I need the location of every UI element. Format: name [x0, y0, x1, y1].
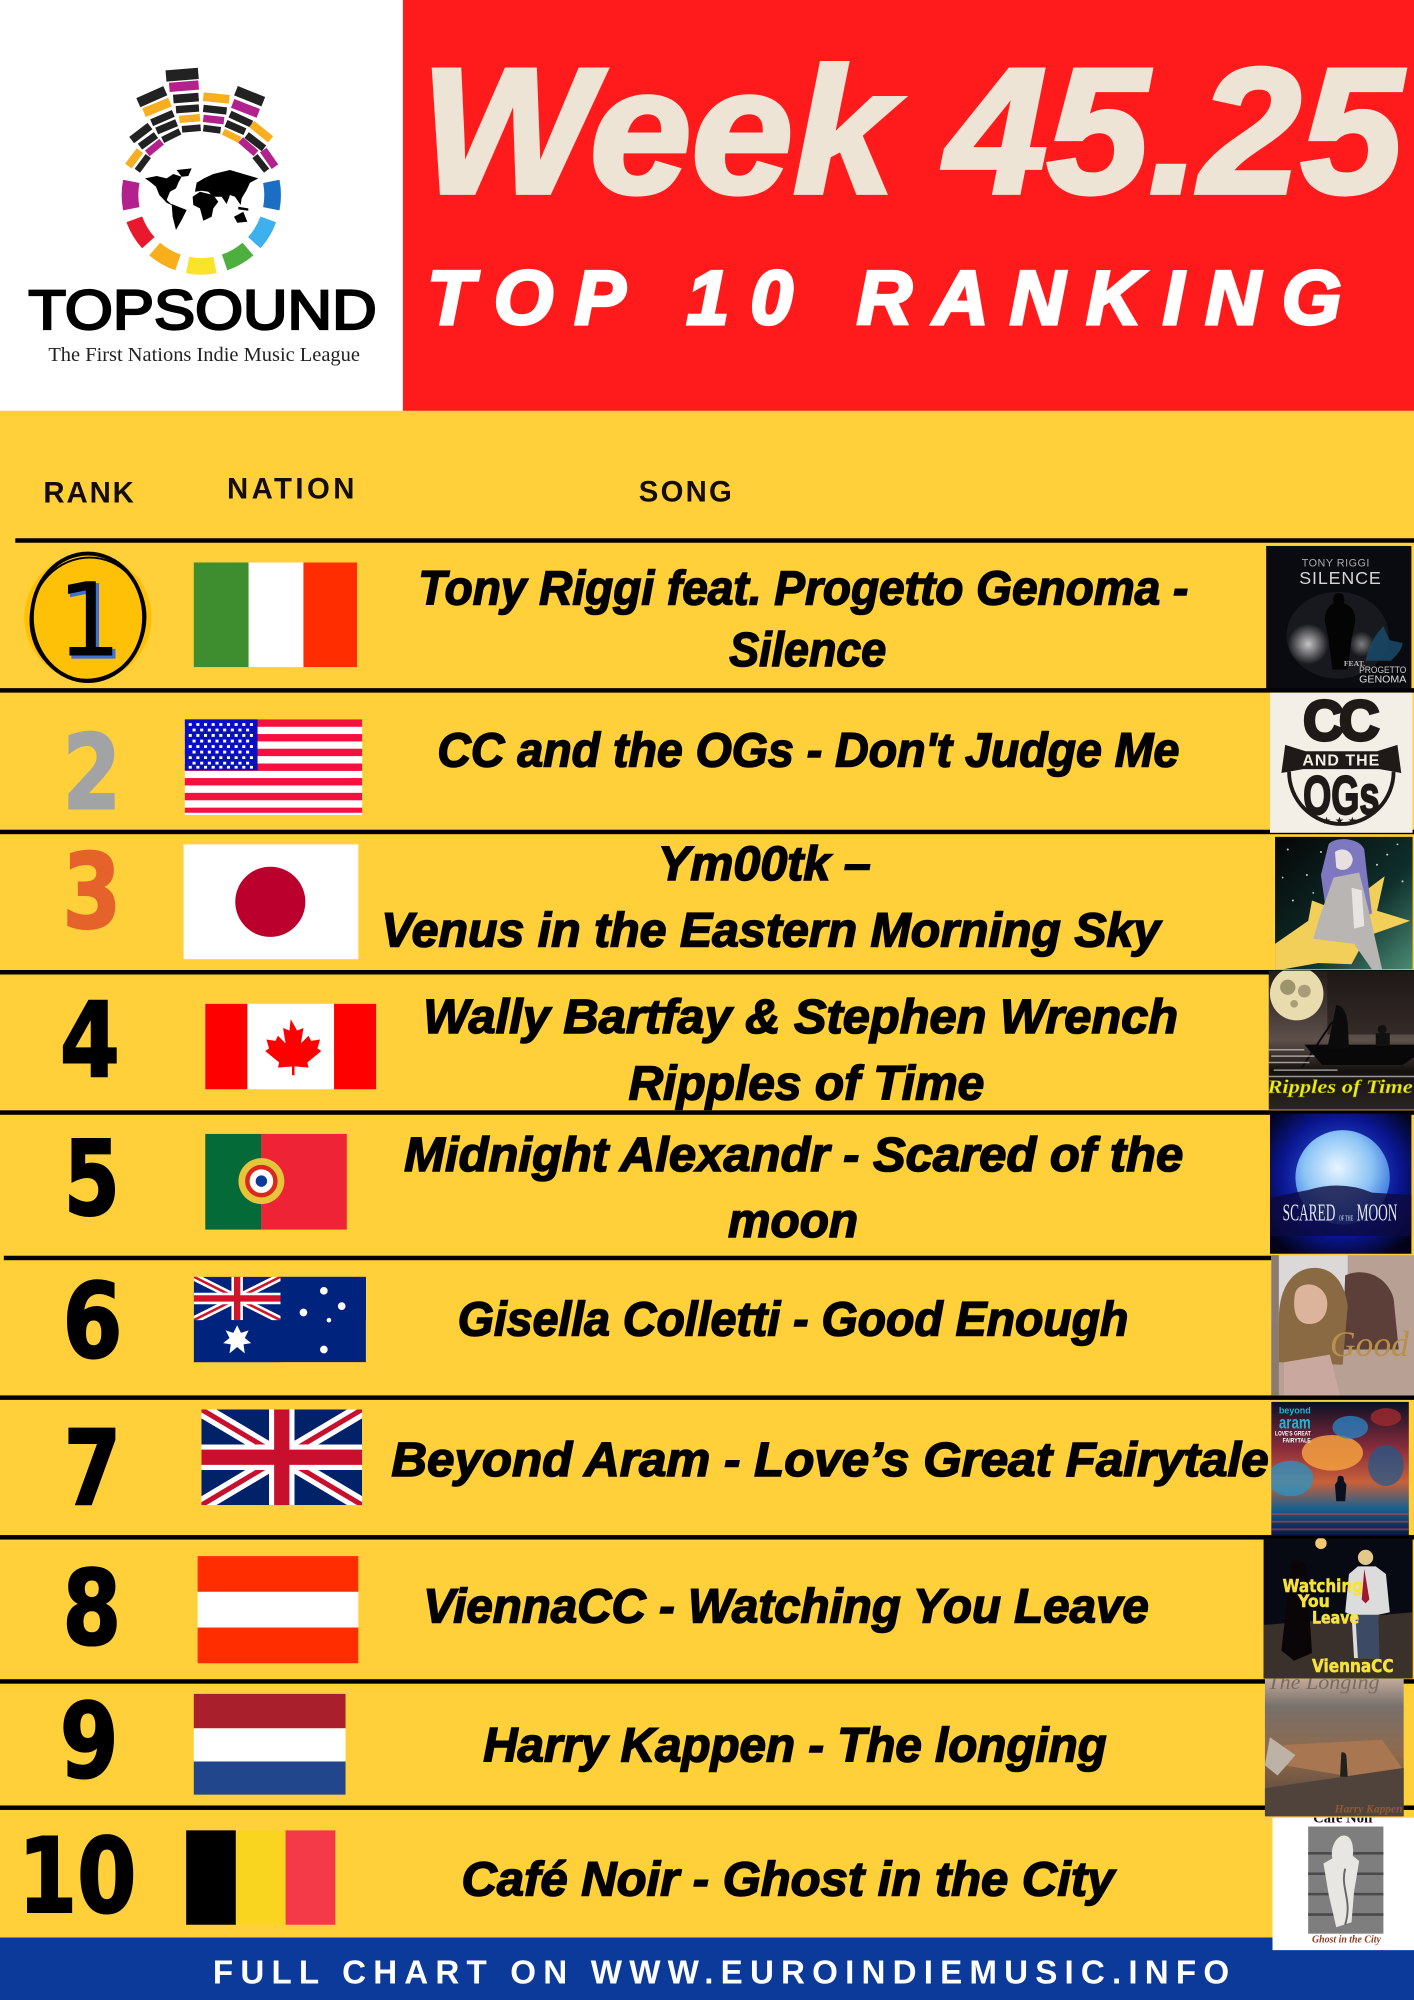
rank 1 badge: 1: [57, 562, 122, 681]
song 1: Tony Riggi feat. Progetto Genoma -: [418, 562, 1188, 616]
song 4: Wally Bartfay & Stephen Wrench: [423, 990, 1178, 1044]
album cover 1: [1266, 546, 1412, 688]
flag: Portugal: [205, 1134, 347, 1230]
album cover 2: CC: [1303, 689, 1380, 752]
wordmark: TOPSOUND: [28, 279, 377, 341]
song titles: [381, 562, 1269, 1906]
song 3: Venus in the Eastern Morning Sky: [381, 903, 1162, 957]
song 9: Harry Kappen - The longing: [483, 1718, 1107, 1772]
flag: Australia: [194, 1276, 366, 1362]
rank 1 badge: 1: [59, 564, 124, 683]
album cover 10: Café Noir: [1313, 1811, 1375, 1827]
song 4: Ripples of Time: [629, 1056, 984, 1110]
flag: Japan: [184, 844, 358, 959]
album cover 7: aram: [1279, 1413, 1311, 1433]
album cover 2: AND THE: [1302, 752, 1380, 769]
album cover 7: beyond: [1279, 1405, 1311, 1415]
album cover 7: [1271, 1402, 1409, 1536]
tagline: The First Nations Indie Music League: [48, 344, 360, 366]
album cover 8: You: [1297, 1592, 1330, 1611]
rank 6: 6: [62, 1262, 122, 1382]
rank 3: 3: [62, 832, 121, 952]
album cover 6: Good: [1330, 1324, 1409, 1364]
album cover 7: LOVE'S GREAT: [1275, 1431, 1311, 1438]
album cover 7: FAIRYTALE: [1283, 1438, 1311, 1445]
rank 9: 9: [60, 1682, 119, 1802]
header: rank: RANK: [43, 477, 134, 510]
rank 1 badge: [19, 547, 157, 690]
album cover 9: The Longing: [1267, 1672, 1380, 1694]
footer text: FULL CHART ON WWW.EUROINDIEMUSIC.INFO: [213, 1954, 1229, 1991]
icon: world map: [145, 168, 258, 230]
panel: logo: [0, 0, 403, 411]
album cover 3: [1275, 836, 1413, 970]
panel: title: [403, 0, 1414, 411]
song 6: Gisella Colletti - Good Enough: [458, 1292, 1128, 1346]
album cover 2: ★★★: [1322, 816, 1361, 827]
album cover 1: PROGETTO: [1359, 665, 1406, 675]
flag: Italy: [194, 562, 357, 667]
icon: equalizer arcs: [128, 73, 275, 171]
album cover 8: Leave: [1312, 1609, 1359, 1628]
flag: Netherlands: [194, 1694, 346, 1795]
flags: [184, 562, 376, 1925]
header: nation: NATION: [227, 473, 354, 506]
rank 5: 5: [64, 1119, 120, 1239]
song 5: [404, 1128, 1183, 1248]
song 1: [418, 562, 1188, 677]
rank numbers: [18, 547, 157, 1937]
footer bar: [0, 1938, 1414, 2000]
album cover 1: FEAT.: [1344, 659, 1365, 668]
subtitle: TOP 10 RANKING: [427, 256, 1341, 341]
album cover 1: GENOMA: [1359, 674, 1407, 685]
album cover 4: [1266, 970, 1414, 1110]
rank 2: 2: [62, 714, 121, 834]
rank 10: 10: [18, 1817, 136, 1937]
logo mark and wordmark: [28, 73, 377, 366]
song 7: Beyond Aram - Love’s Great Fairytale: [391, 1433, 1269, 1487]
album cover 9: [1264, 1672, 1404, 1816]
album cover 1: SILENCE: [1299, 568, 1381, 588]
album cover 8: ViennaCC: [1312, 1656, 1394, 1677]
album cover 9: Harry Kappen: [1334, 1803, 1403, 1816]
album cover 8: [1264, 1538, 1413, 1679]
song 3: [381, 837, 1162, 957]
column headers: [43, 473, 732, 510]
song 2: CC and the OGs - Don't Judge Me: [437, 724, 1179, 778]
song 5: Midnight Alexandr - Scared of the: [404, 1128, 1183, 1182]
song 5: moon: [728, 1194, 858, 1248]
song 10: Café Noir - Ghost in the City: [462, 1852, 1116, 1906]
header: song: SONG: [639, 475, 732, 508]
flag: Belgium: [186, 1830, 335, 1925]
flag: Canada: [205, 1004, 376, 1089]
album cover 6: [1271, 1255, 1414, 1396]
rank 4: 4: [60, 982, 120, 1102]
album cover 4: Ripples of Time: [1266, 1077, 1413, 1098]
album cover 10: Ghost in the City: [1312, 1935, 1381, 1946]
song 3: Ym00tk –: [658, 837, 871, 891]
song 1: Silence: [729, 623, 886, 677]
icon: colour ring: [130, 181, 273, 266]
album cover 10: [1272, 1811, 1414, 1950]
rank 8: 8: [62, 1549, 121, 1669]
album cover 5: [1270, 1114, 1412, 1254]
rank 7: 7: [64, 1409, 121, 1529]
flag: Austria: [198, 1556, 358, 1663]
album cover 8: Watching: [1283, 1576, 1363, 1597]
song 8: ViennaCC - Watching You Leave: [423, 1579, 1149, 1633]
song 4: [423, 990, 1178, 1110]
album cover 1: TONY RIGGI: [1302, 557, 1369, 569]
album cover 2: [1270, 689, 1413, 833]
title: Week 45.25: [421, 31, 1405, 231]
flag: USA: [185, 719, 362, 815]
flag: United Kingdom: [201, 1410, 362, 1506]
